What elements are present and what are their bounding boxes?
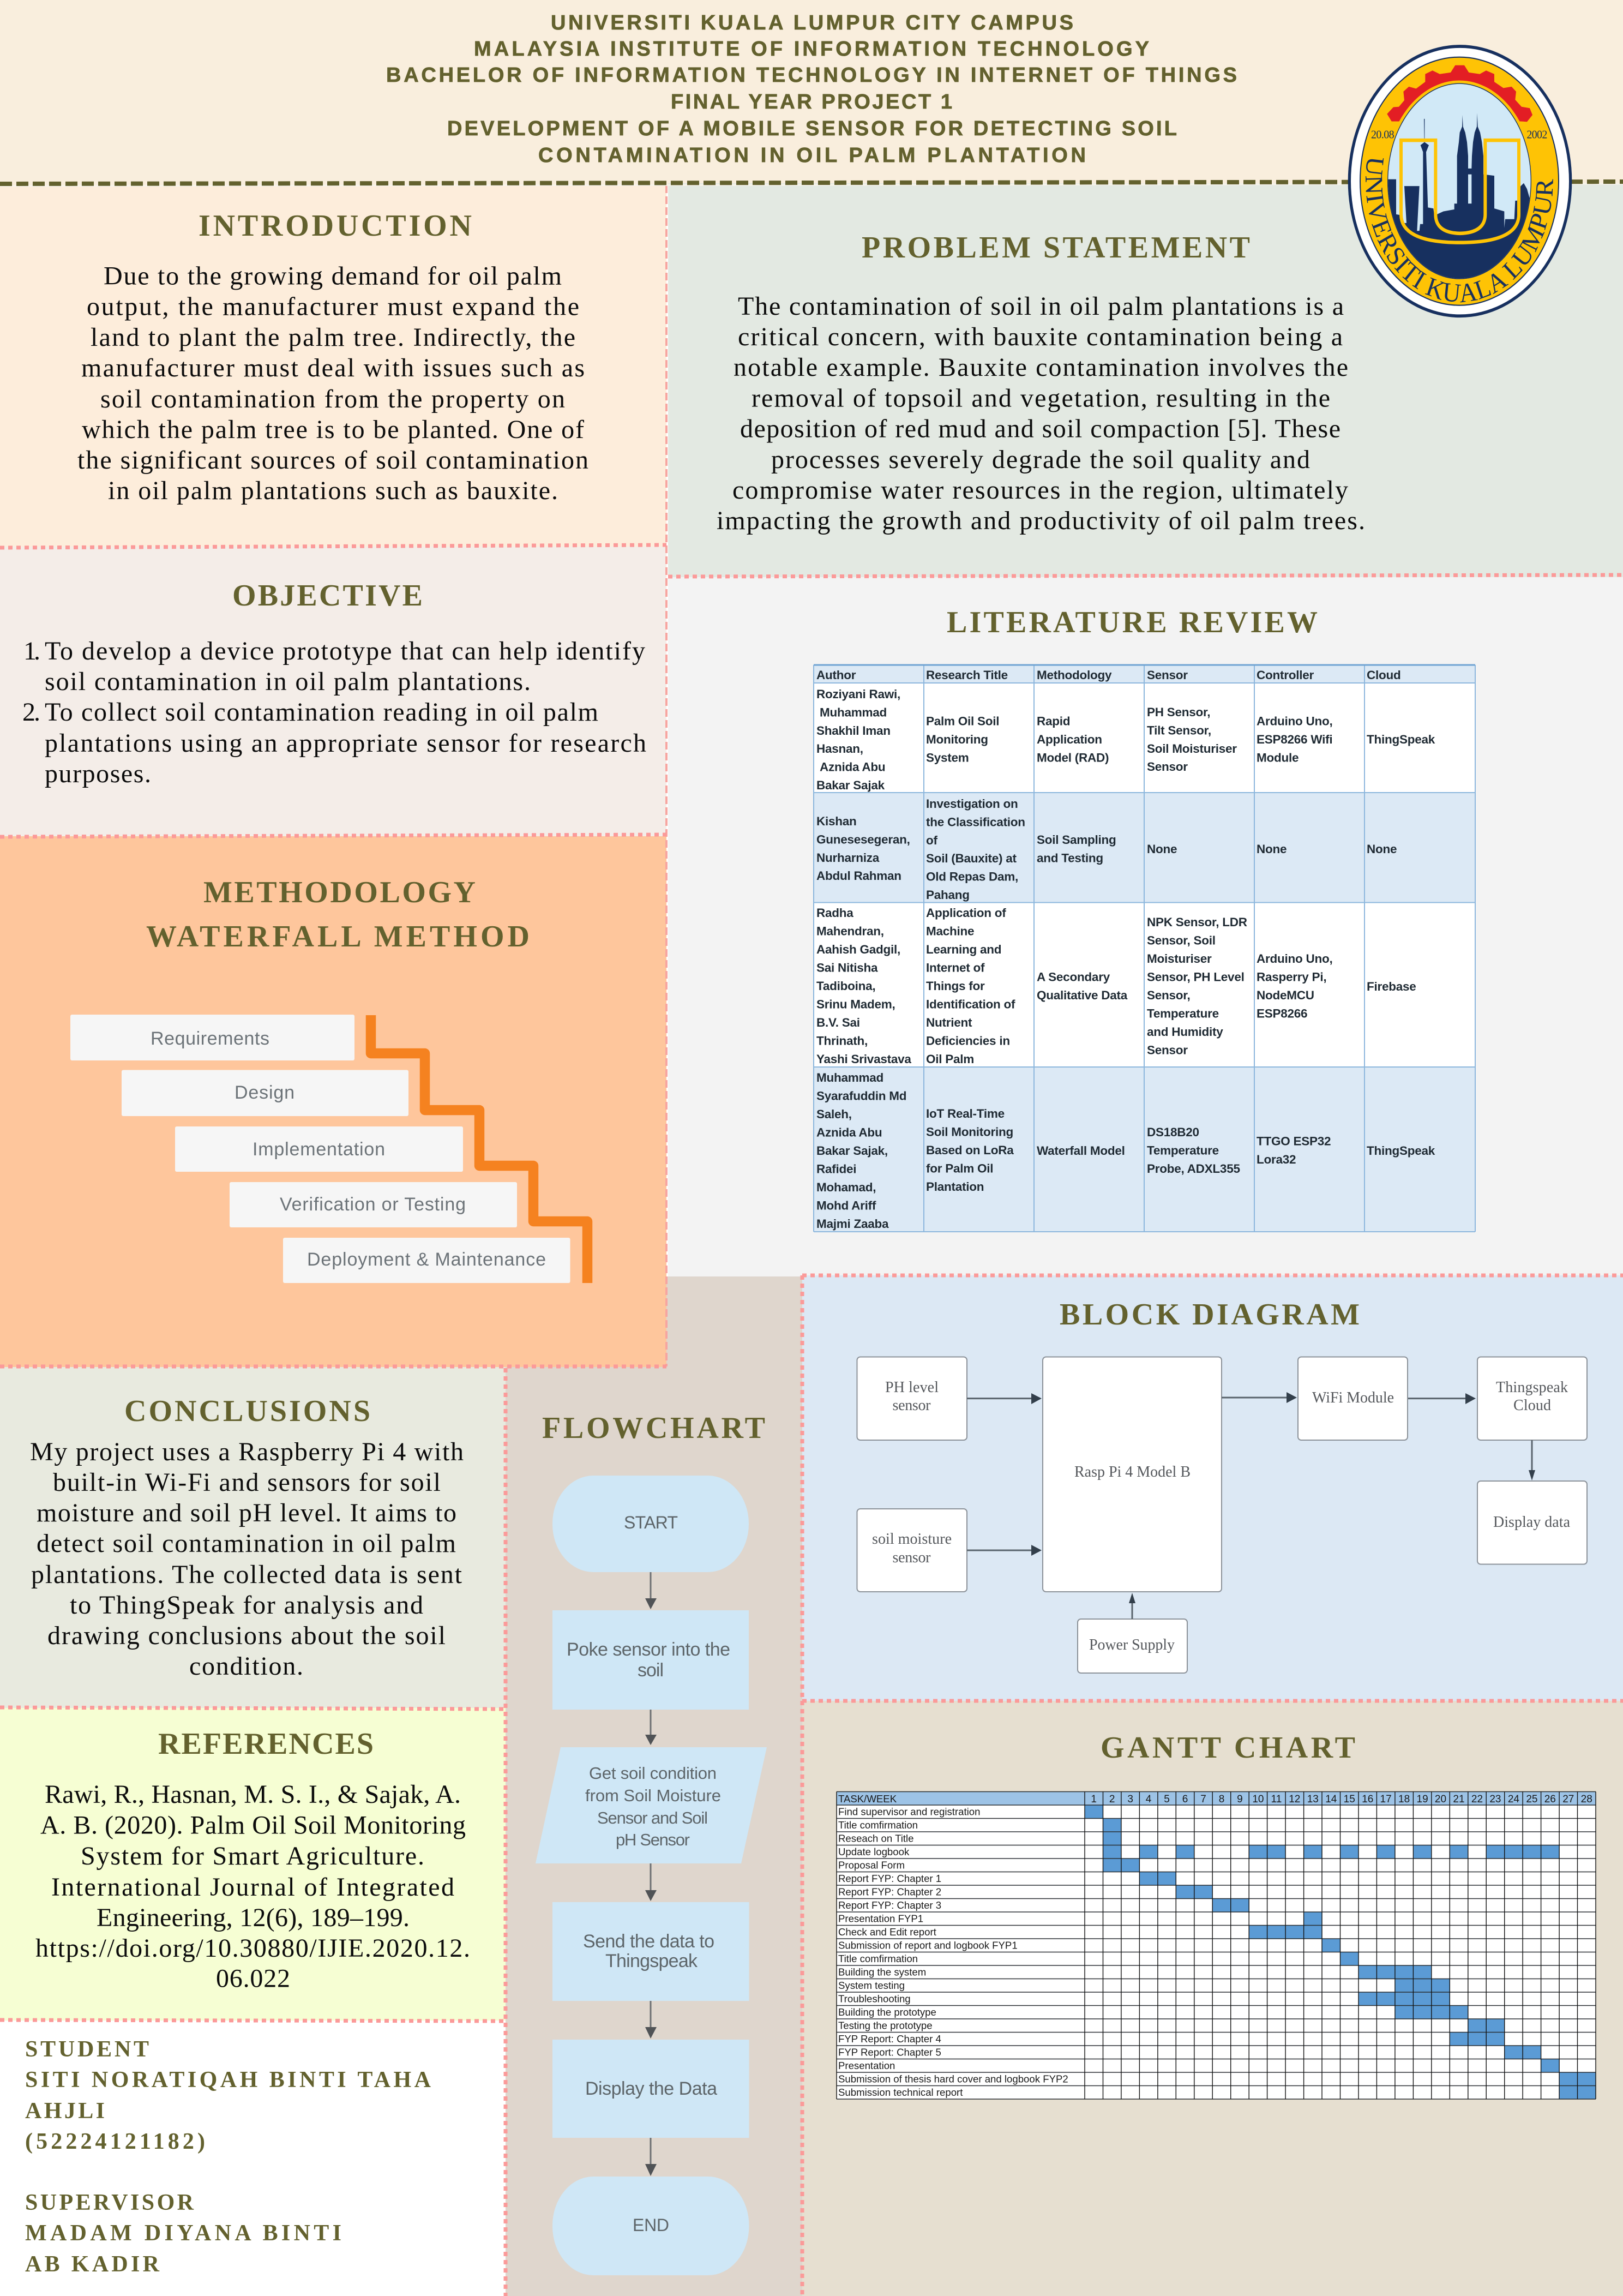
table: literature comparison: Sai Nitisha: [816, 961, 878, 974]
table: literature comparison: Abdul Rahman: [816, 869, 901, 883]
table: literature comparison: Application: [1037, 733, 1102, 746]
panel: literature review: [668, 577, 1623, 1276]
table: literature comparison: Muhammad: [816, 1071, 883, 1084]
gantt table: Building the prototype: [838, 2006, 936, 2018]
table: literature comparison: Nurharniza: [816, 851, 880, 865]
table: literature comparison: Moisturiser: [1147, 952, 1212, 966]
panel: gantt chart: [802, 1701, 1623, 2296]
block: wifi module: WiFi Module: [1312, 1389, 1394, 1406]
panel: references: Rawi, R., Hasnan, M. S. I., & Sajak, A.: [45, 1780, 461, 1809]
table: literature comparison: Lora32: [1257, 1153, 1296, 1166]
waterfall diagram: Requirements: [151, 1028, 269, 1049]
table: literature comparison: Syarafuddin Md: [816, 1089, 906, 1103]
panel: introduction: soil contamination from the property on: [100, 385, 565, 413]
table: literature comparison: Aznida Abu: [820, 760, 885, 774]
gantt table: 28: [1581, 1794, 1592, 1805]
table: literature comparison: Plantation: [926, 1180, 984, 1194]
panel: references: International Journal of Integrated: [51, 1873, 454, 1902]
table: literature comparison: Old Repas Dam,: [926, 870, 1018, 884]
panel: references: REFERENCES: [158, 1727, 374, 1761]
panel: student and supervisor: AHJLI: [25, 2099, 105, 2124]
panel: introduction: which the palm tree is to be planted. One of: [82, 415, 584, 444]
gantt table: FYP Report: Chapter 4: [838, 2033, 941, 2045]
table: literature comparison: Mohd Ariff: [816, 1199, 876, 1212]
table: literature comparison: and Testing: [1037, 851, 1103, 865]
header panel: BACHELOR OF INFORMATION TECHNOLOGY IN INTERNET OF THINGS: [386, 64, 1237, 87]
table: literature comparison: Machine: [926, 924, 974, 938]
table: literature comparison: Gunesesegeran,: [816, 832, 910, 846]
table: literature comparison: Majmi Zaaba: [816, 1217, 889, 1231]
table: literature comparison: PH Sensor,: [1147, 705, 1210, 719]
gantt table: 15: [1344, 1794, 1355, 1805]
gantt table: Check and Edit report: [838, 1926, 937, 1938]
gantt task bars: [1085, 1805, 1596, 2099]
gantt table: 18: [1398, 1794, 1410, 1805]
arrow: [645, 1710, 657, 1745]
flow: poke sensor: soil: [638, 1660, 664, 1681]
panel: conclusions: CONCLUSIONS: [124, 1394, 370, 1428]
panel: methodology: METHODOLOGY: [203, 876, 476, 909]
panel: flowchart: [506, 1276, 802, 2296]
table: literature comparison: Application of: [926, 906, 1006, 920]
waterfall diagram: Verification or Testing: [280, 1194, 466, 1215]
panel: conclusions: drawing conclusions about the soil: [47, 1621, 446, 1650]
table: literature comparison: Saleh,: [816, 1107, 852, 1121]
gantt table: 5: [1164, 1794, 1170, 1805]
gantt table: Report FYP: Chapter 1: [838, 1873, 941, 1884]
flow: send data: Thingspeak: [605, 1951, 698, 1971]
gantt table: Find supervisor and registration: [838, 1806, 980, 1818]
table: literature comparison: Sensor, PH Level: [1147, 970, 1245, 984]
flow: get soil condition: Get soil condition: [589, 1764, 717, 1783]
panel: problem statement: compromise water resources in the region, ultimately: [732, 476, 1348, 505]
table: literature comparison: Radha: [816, 906, 853, 920]
panel: introduction: manufacturer must deal with issues such as: [81, 353, 585, 382]
table: literature comparison: for Palm Oil: [926, 1162, 993, 1175]
block: ph level sensor: sensor: [892, 1397, 931, 1414]
gantt table: 3: [1127, 1794, 1133, 1805]
panel: problem statement: deposition of red mud and soil compaction [5]. These: [740, 415, 1341, 443]
table: literature comparison: Deficiencies in: [926, 1034, 1010, 1047]
table: literature comparison: Based on LoRa: [926, 1143, 1014, 1157]
table: literature comparison: Bakar Sajak: [816, 778, 885, 792]
panel: introduction: in oil palm plantations such as bauxite.: [108, 476, 558, 505]
block: power supply: Power Supply: [1089, 1636, 1175, 1653]
table: literature comparison: IoT Real-Time: [926, 1107, 1005, 1120]
table: literature comparison: Mahendran,: [816, 924, 884, 938]
arrow: soil to pi: [967, 1545, 1042, 1556]
table: literature comparison: Firebase: [1367, 980, 1416, 993]
table: literature comparison: Learning and: [926, 943, 1001, 956]
gantt table: 19: [1417, 1794, 1428, 1805]
table: literature comparison: ESP8266 Wifi: [1257, 733, 1332, 746]
gantt table: 6: [1182, 1794, 1188, 1805]
panel: student and supervisor: SITI NORATIQAH BINTI TAHA: [25, 2067, 431, 2093]
heading: literature review: LITERATURE REVIEW: [947, 606, 1318, 639]
table: literature comparison: Probe, ADXL355: [1147, 1162, 1240, 1176]
panel: introduction: Due to the growing demand for oil palm: [104, 262, 562, 291]
block: thingspeak cloud: Thingspeak: [1496, 1379, 1568, 1396]
gantt table: [837, 1791, 1596, 2099]
gantt table: 13: [1307, 1794, 1319, 1805]
flow: get soil condition: pH Sensor: [616, 1830, 690, 1849]
block: soil moisture sensor: soil moisture: [872, 1531, 952, 1548]
flow: start: START: [624, 1513, 678, 1532]
gantt table: 9: [1237, 1794, 1243, 1805]
gantt table: Presentation FYP1: [838, 1913, 923, 1925]
panel: objective: purposes.: [45, 759, 151, 788]
panel: methodology: [0, 836, 666, 1367]
gantt table: Title comfirmation: [838, 1819, 918, 1831]
table: literature comparison: Research Title: [926, 668, 1008, 682]
gantt table: Proposal Form: [838, 1859, 905, 1871]
panel: student and supervisor: [0, 2021, 506, 2296]
table: literature comparison: Srinu Madem,: [816, 997, 895, 1011]
table: literature comparison: DS18B20: [1147, 1125, 1199, 1139]
arrow: wifi to thingspeak: [1408, 1393, 1476, 1404]
panel: problem statement: [668, 183, 1623, 577]
flow: end: END: [633, 2215, 669, 2235]
table: literature comparison: Rafidei: [816, 1162, 856, 1176]
gantt table: Submission technical report: [838, 2087, 963, 2098]
panel: block diagram: [802, 1275, 1623, 1701]
block: display data: [1477, 1481, 1587, 1564]
gantt table: Submission of thesis hard cover and logbook FYP2: [838, 2073, 1068, 2085]
panel: introduction: output, the manufacturer must expand the: [87, 292, 579, 321]
gantt table: 21: [1453, 1794, 1465, 1805]
table: literature comparison: Arduino Uno,: [1257, 715, 1332, 728]
panel: introduction: the significant sources of soil contamination: [77, 446, 588, 475]
arrow: thingspeak to display: [1529, 1440, 1535, 1480]
gantt table: 2: [1109, 1794, 1115, 1805]
table: literature comparison: Internet of: [926, 961, 985, 974]
table: literature comparison: Muhammad: [820, 705, 887, 719]
panel: student and supervisor: SUPERVISOR: [25, 2190, 194, 2215]
gantt table: 14: [1325, 1794, 1337, 1805]
gantt table: Report FYP: Chapter 2: [838, 1886, 941, 1897]
gantt table: 23: [1489, 1794, 1501, 1805]
header panel: UNIVERSITI KUALA LUMPUR CITY CAMPUS: [551, 11, 1073, 34]
gantt table: 1: [1091, 1794, 1097, 1805]
table: literature comparison: Kishan: [816, 814, 857, 828]
panel: introduction: land to plant the palm tree. Indirectly, the: [91, 323, 575, 352]
arrow: power to pi: [1129, 1593, 1135, 1619]
flow: display data: Display the Data: [585, 2078, 717, 2099]
gantt table: Update logbook: [838, 1846, 910, 1857]
table: literature comparison: Cloud: [1367, 668, 1400, 682]
gantt table: 24: [1508, 1794, 1519, 1805]
panel: introduction: [0, 185, 666, 547]
table: literature comparison: Aznida Abu: [816, 1126, 882, 1139]
waterfall diagram: Design: [235, 1082, 294, 1103]
panel: problem statement: PROBLEM STATEMENT: [862, 231, 1250, 265]
gantt table: Presentation: [838, 2060, 895, 2071]
table: literature comparison: Module: [1257, 751, 1299, 764]
panel: references: https://doi.org/10.30880/IJIE.2020.12.: [35, 1934, 470, 1963]
panel: problem statement: critical concern, with bauxite contamination being a: [738, 322, 1343, 351]
table: literature comparison: Monitoring: [926, 733, 988, 746]
table: literature comparison: None: [1367, 842, 1397, 856]
table: literature comparison: Temperature: [1147, 1143, 1219, 1158]
table: literature comparison: Investigation on: [926, 797, 1018, 811]
block: soil moisture sensor: sensor: [892, 1549, 931, 1566]
panel: conclusions: built-in Wi-Fi and sensors for soil: [53, 1468, 441, 1497]
table: literature comparison: Soil Sampling: [1037, 833, 1116, 847]
panel: objective: plantations using an appropriate sensor for research: [45, 729, 646, 758]
panel: conclusions: plantations. The collected data is sent: [31, 1560, 462, 1589]
panel: conclusions: [0, 1367, 506, 1708]
gantt table: 10: [1252, 1794, 1264, 1805]
arrow: [645, 2001, 657, 2039]
table: literature comparison: [814, 665, 1475, 1232]
table: literature comparison: Methodology: [1037, 668, 1112, 682]
block: raspberry pi: [1043, 1357, 1222, 1592]
panel: references: System for Smart Agriculture.: [81, 1842, 424, 1871]
arrow: [645, 1572, 657, 1609]
logo: Universiti Kuala Lumpur crest: UNIVERSITI KUALA LUMPUR: [1366, 158, 1553, 302]
table: literature comparison: Sensor: [1147, 760, 1188, 774]
flow: get soil condition: Sensor and Soil: [597, 1808, 708, 1827]
table: literature comparison: A Secondary: [1037, 970, 1110, 984]
panel: conclusions: to ThingSpeak for analysis and: [70, 1591, 423, 1620]
block: wifi module: [1298, 1357, 1408, 1440]
panel: problem statement: The contamination of soil in oil palm plantations is a: [738, 292, 1344, 321]
gantt table: FYP Report: Chapter 5: [838, 2047, 941, 2058]
flow: start: [552, 1476, 749, 1572]
flow: end: [552, 2177, 749, 2275]
gantt table: Report FYP: Chapter 3: [838, 1899, 941, 1911]
panel: objective: To collect soil contamination reading in oil palm: [45, 698, 598, 727]
gantt table: Testing the prototype: [838, 2019, 933, 2031]
table: literature comparison: Rasperry Pi,: [1257, 970, 1326, 984]
panel: student and supervisor: MADAM DIYANA BINTI: [25, 2221, 341, 2246]
table: literature comparison: Sensor,: [1147, 988, 1191, 1002]
gantt table: 20: [1435, 1794, 1446, 1805]
gantt table: 16: [1362, 1794, 1373, 1805]
panel: references: A. B. (2020). Palm Oil Soil Monitoring: [40, 1811, 466, 1839]
table: literature comparison: Tilt Sensor,: [1147, 723, 1211, 737]
gantt table: Title comfirmation: [838, 1953, 918, 1964]
logo: Universiti Kuala Lumpur crest: 2002: [1526, 129, 1547, 141]
table: literature comparison: B.V. Sai: [816, 1016, 860, 1029]
table: literature comparison: Author: [816, 668, 856, 682]
table: literature comparison: NPK Sensor, LDR: [1147, 915, 1247, 929]
gantt table: 25: [1526, 1794, 1537, 1805]
header dashed line: [0, 182, 1623, 186]
panel: student and supervisor: STUDENT: [25, 2037, 149, 2062]
table: literature comparison: Soil Monitoring: [926, 1125, 1013, 1139]
flow: display data: [552, 2040, 749, 2138]
table: literature comparison: Roziyani Rawi,: [816, 687, 900, 701]
panel: objective: 1.: [23, 637, 40, 666]
panel: problem statement: notable example. Bauxite contamination involves the: [734, 353, 1348, 382]
gantt table: 12: [1289, 1794, 1300, 1805]
panel: objective: 2.: [22, 698, 40, 727]
table: literature comparison: Arduino Uno,: [1257, 952, 1332, 966]
panel: objective: [0, 547, 666, 836]
table: literature comparison: ESP8266: [1257, 1007, 1307, 1020]
table: literature comparison: Qualitative Data: [1037, 988, 1128, 1002]
gantt table: System testing: [838, 1980, 905, 1991]
panel: references: [0, 1708, 506, 2021]
gantt table: 17: [1380, 1794, 1392, 1805]
gantt table: Reseach on Title: [838, 1833, 914, 1844]
table: literature comparison: Hasnan,: [816, 742, 863, 756]
arrow: pi to wifi: [1222, 1392, 1297, 1403]
gantt table: 11: [1271, 1794, 1282, 1805]
panel: problem statement: processes severely degrade the soil quality and: [771, 445, 1310, 474]
table: literature comparison: TTGO ESP32: [1257, 1134, 1331, 1148]
header panel: DEVELOPMENT OF A MOBILE SENSOR FOR DETECTING SOIL: [447, 117, 1177, 140]
table: literature comparison: Yashi Srivastava: [816, 1052, 911, 1066]
panel: student and supervisor: (52224121182): [25, 2129, 205, 2154]
table: literature comparison: Sensor, Soil: [1147, 934, 1216, 947]
table: literature comparison: Identification of: [926, 997, 1015, 1011]
arrow: [645, 1863, 657, 1901]
arrow: [645, 2138, 657, 2176]
table: literature comparison: Things for: [926, 979, 985, 993]
heading: gantt chart: GANTT CHART: [1101, 1731, 1355, 1765]
flow: poke sensor: Poke sensor into the: [567, 1639, 730, 1660]
waterfall diagram: [70, 1015, 587, 1283]
gantt table: 27: [1562, 1794, 1574, 1805]
waterfall diagram: Implementation: [253, 1139, 385, 1160]
table: literature comparison: System: [926, 751, 969, 764]
flow: send data: [552, 1902, 749, 2001]
table: literature comparison: Soil (Bauxite) at: [926, 852, 1017, 865]
panel: references: 06.022: [216, 1964, 290, 1993]
gantt table: Submission of report and logbook FYP1: [838, 1940, 1018, 1951]
block: ph level sensor: [857, 1357, 967, 1440]
panel: methodology: WATERFALL METHOD: [146, 920, 530, 954]
table: literature comparison: Controller: [1257, 668, 1314, 682]
flow: send data: Send the data to: [583, 1931, 714, 1952]
block: raspberry pi: Rasp Pi 4 Model B: [1074, 1464, 1191, 1480]
table: literature comparison: Sensor: [1147, 668, 1188, 682]
table: literature comparison: ThingSpeak: [1367, 733, 1435, 746]
table: literature comparison: and Humidity: [1147, 1025, 1223, 1039]
table: literature comparison: Rapid: [1037, 715, 1070, 728]
table: literature comparison: the Classification: [926, 815, 1025, 829]
table: literature comparison: Waterfall Model: [1037, 1144, 1125, 1158]
table: literature comparison: Palm Oil Soil: [926, 715, 999, 728]
table: literature comparison: Oil Palm: [926, 1052, 974, 1066]
gantt table: Building the system: [838, 1966, 926, 1978]
block: ph level sensor: PH level: [885, 1379, 939, 1396]
panel: conclusions: My project uses a Raspberry Pi 4 with: [30, 1437, 464, 1466]
waterfall diagram: Deployment & Maintenance: [307, 1249, 546, 1270]
panel: objective: OBJECTIVE: [232, 579, 423, 613]
block: soil moisture sensor: [857, 1509, 967, 1592]
panel: student and supervisor: AB KADIR: [25, 2252, 160, 2277]
table: literature comparison: NodeMCU: [1257, 988, 1314, 1002]
table: literature comparison: Aahish Gadgil,: [816, 943, 900, 956]
table: literature comparison: Temperature: [1147, 1007, 1219, 1020]
gantt table: 8: [1219, 1794, 1224, 1805]
gantt table: 26: [1544, 1794, 1556, 1805]
logo: Universiti Kuala Lumpur crest: [1348, 45, 1572, 317]
heading: flowchart: FLOWCHART: [542, 1411, 765, 1445]
gantt table: 4: [1146, 1794, 1152, 1805]
panel: conclusions: detect soil contamination in oil palm: [37, 1529, 456, 1558]
panel: problem statement: impacting the growth and productivity of oil palm trees.: [717, 506, 1365, 535]
header panel: FINAL YEAR PROJECT 1: [671, 91, 952, 113]
block: thingspeak cloud: [1477, 1357, 1587, 1440]
arrow: ph to pi: [967, 1393, 1042, 1404]
table: literature comparison: Bakar Sajak,: [816, 1144, 888, 1158]
panel: problem statement: removal of topsoil and vegetation, resulting in the: [752, 384, 1330, 413]
flow: get soil condition: from Soil Moisture: [585, 1786, 721, 1805]
panel: references: Engineering, 12(6), 189–199.: [97, 1903, 410, 1932]
table: literature comparison: Model (RAD): [1037, 751, 1109, 764]
panel: objective: To develop a device prototype that can help identify: [45, 637, 645, 666]
table: literature comparison: Thrinath,: [816, 1034, 868, 1047]
header panel: CONTAMINATION IN OIL PALM PLANTATION: [538, 144, 1086, 167]
table: literature comparison: of: [926, 834, 937, 847]
flow: poke sensor: [552, 1610, 749, 1710]
block: display data: Display data: [1493, 1514, 1571, 1531]
table: literature comparison: Pahang: [926, 888, 970, 902]
block: thingspeak cloud: Cloud: [1513, 1397, 1551, 1414]
table: literature comparison: Tadiboina,: [816, 979, 875, 993]
header panel: [0, 0, 1623, 185]
table: literature comparison: Nutrient: [926, 1016, 972, 1029]
gantt table: Troubleshooting: [838, 1993, 911, 2004]
table: literature comparison: Sensor: [1147, 1043, 1188, 1057]
header panel: MALAYSIA INSTITUTE OF INFORMATION TECHNOLOGY: [474, 38, 1149, 61]
gantt table: 22: [1471, 1794, 1483, 1805]
table: literature comparison: Shakhil Iman: [816, 724, 891, 738]
heading: block diagram: BLOCK DIAGRAM: [1060, 1298, 1360, 1332]
table: literature comparison: Soil Moisturiser: [1147, 742, 1237, 756]
table: literature comparison: Mohamad,: [816, 1180, 876, 1194]
panel: introduction: INTRODUCTION: [199, 209, 472, 243]
flow: get soil condition: [536, 1747, 767, 1863]
panel: objective: soil contamination in oil palm plantations.: [45, 667, 531, 696]
panel: conclusions: moisture and soil pH level. It aims to: [37, 1498, 456, 1527]
table: literature comparison: None: [1147, 842, 1177, 856]
gantt table: TASK/WEEK: [838, 1793, 897, 1805]
table: literature comparison: ThingSpeak: [1367, 1144, 1435, 1158]
panel: conclusions: condition.: [189, 1652, 303, 1681]
logo: Universiti Kuala Lumpur crest: 20.08: [1371, 129, 1394, 141]
table: literature comparison: None: [1257, 842, 1287, 856]
gantt table: 7: [1200, 1794, 1206, 1805]
block: power supply: [1078, 1619, 1187, 1673]
